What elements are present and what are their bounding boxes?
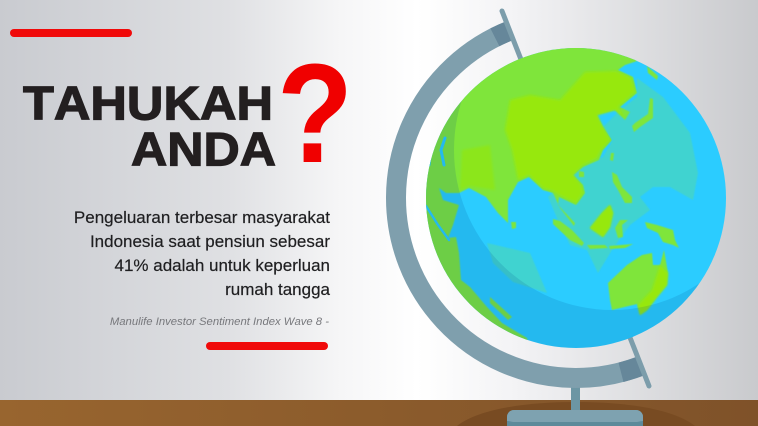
Sakhalin: [647, 66, 658, 80]
globe stand: [396, 11, 649, 426]
globe: [426, 48, 726, 348]
inland seas: [426, 138, 449, 240]
bright land highlights: [460, 71, 668, 315]
title: TAHUKAH ANDA: [23, 78, 276, 176]
Australia: [608, 250, 668, 315]
Eurasia and Africa: [426, 48, 638, 340]
title: TAHUKAH ANDA: TAHUKAH: [23, 78, 273, 130]
meridian ring: [396, 30, 641, 378]
Taiwan: [610, 153, 614, 161]
Madagascar: [490, 297, 512, 320]
body text: [74, 208, 331, 299]
Sumatra: [553, 219, 584, 246]
body text: 41% adalah untuk keperluan: [114, 256, 330, 275]
Philippines: [612, 172, 632, 203]
body text: Pengeluaran terbesar masyarakat: [74, 208, 330, 227]
land masses: [426, 48, 680, 340]
Hainan: [579, 171, 584, 177]
Borneo: [590, 205, 613, 237]
source note: Manulife Investor Sentiment Index Wave 8 -: [110, 316, 329, 328]
title: TAHUKAH ANDA: ANDA: [131, 124, 276, 176]
Japan: [632, 98, 653, 132]
Lesser Sunda: [609, 244, 633, 249]
body text: rumah tangga: [225, 280, 331, 299]
stand pole: [571, 385, 580, 412]
New Guinea: [645, 222, 679, 248]
ocean: [426, 48, 726, 348]
body text: Indonesia saat pensiun sebesar: [90, 232, 330, 251]
Sri Lanka: [511, 222, 516, 229]
axis rod: [502, 11, 649, 386]
bottom red bar: [206, 342, 328, 350]
globe shading crescent: [426, 102, 699, 348]
shallow water: [487, 78, 698, 293]
Java: [587, 245, 608, 249]
ring top collar: [495, 30, 511, 37]
wooden floor: [0, 400, 758, 426]
top red bar: [10, 29, 132, 37]
red question mark: ?: [277, 34, 353, 192]
ring bottom collar: [621, 366, 641, 372]
stand base: [507, 410, 643, 426]
Sulawesi: [615, 220, 628, 238]
